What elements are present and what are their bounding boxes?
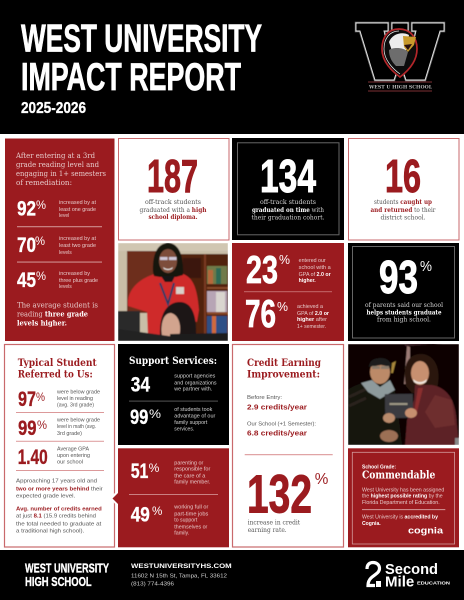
description: district school. [380,214,426,222]
text: credits: Avg. number of credits earned [16,506,102,512]
text: credits: at just 8.1 (15.9 credits behind [16,514,96,520]
number 187: 187 [147,150,198,202]
closing text: levels higher. [17,319,67,328]
panel: credit earning improvement [232,344,344,547]
stat: 34: and organizations [174,380,217,386]
heading: Typical Student [18,357,97,369]
description [140,199,207,221]
text: age and grade: Approaching 17 years old and [16,479,97,485]
stat: 49%: 49 [131,504,150,527]
logo: Second Mile Education [367,561,450,591]
stat: 92%: % [36,198,46,212]
stat: 97%: level in reading [57,396,93,402]
text: rating [362,487,445,506]
before entry: Before Entry: [247,395,282,401]
text: rating: West University has been assigned [362,487,445,493]
stat: 1.40: upon entering [57,453,90,459]
stat: 34: support agencies [174,374,216,380]
stat: 49%: to support [174,518,198,524]
description: from high school. [377,316,431,324]
stat: 23%: higher. [299,278,316,284]
intro text: grade reading level and [16,160,99,169]
stat: 51%: family member. [174,480,210,486]
stat: 34 [131,374,217,397]
stat: 51%: 51 [131,460,149,483]
stat: 97% [18,388,100,411]
panel: remediation [5,138,114,341]
stat: 97%: % [36,390,45,404]
description: school diploma. [148,214,198,221]
before entry [247,395,307,411]
stat: 49%: themselves or [174,524,208,530]
intro text [15,151,106,187]
heading: Commendable [362,469,435,482]
description [365,302,443,324]
stat: 49%: part-time jobs [174,511,209,517]
stat: 97%: (avg. 3rd grade) [57,403,94,409]
stat: 70%: % [35,234,45,248]
contact details [131,563,232,588]
year subtitle: 2025-2026 [21,100,86,117]
stat: 99%: family support [174,420,208,426]
school name [25,562,109,589]
stat: 76%: 76 [245,293,276,336]
number 132%: 132 [247,465,312,525]
title [21,18,262,99]
photo: teacher and student [118,243,228,341]
description: off-track students [145,199,201,206]
stat: 51%: % [149,461,160,475]
stat: 34: 34 [131,374,150,397]
logo: Second Mile Education: Second [385,561,438,578]
number 132%: % [315,471,328,488]
text: credits: the total needed to graduate at [16,521,102,527]
panel: student responsibilities [112,448,229,547]
heading [247,357,322,381]
description: students caught up [374,199,432,206]
stat: 99%: 99 [18,417,36,440]
closing text [17,301,98,328]
footer band [0,550,464,600]
stat: 76%: 1+ semester. [297,324,326,330]
heading: Improvement: [247,369,320,381]
contact details: (813) 774-4396 [131,582,174,588]
school name: WEST UNIVERSITY [25,562,109,576]
description [248,519,301,534]
number 16: 16 [385,150,421,202]
stat: 23%: % [279,252,290,267]
stat: 97%: were below grade [57,390,100,396]
stat: 99%: advantage of our [174,414,216,420]
stat: 51% [131,460,211,486]
panel: school grade commendable [348,448,459,547]
description: helps students graduate [366,310,442,316]
description: of parents said our school [365,302,443,309]
stat: 51%: the care of a [174,473,206,479]
stat: 23% [246,249,331,292]
before entry: 2.9 credits/year [247,402,307,411]
our school: 6.8 credits/year [247,429,307,438]
logo: Second Mile Education: Mile [385,574,414,591]
description: graduated with a high [140,207,207,214]
text: credits: a traditional high school). [16,529,85,535]
text: accreditation [362,514,438,527]
stat: 99%: level in math (avg. [57,424,96,430]
stat: 45%: % [36,269,46,283]
description: their graduation cohort. [252,214,325,222]
stat: 99%: of students took [174,407,213,413]
stat: 1.40: our school [57,460,83,466]
closing text: reading three grade [17,310,88,319]
stat: 45%: levels [59,284,72,290]
panel: 16 returned [348,138,459,240]
our school [247,421,316,438]
text: rating: Florida Department of Education. [362,500,440,506]
stat: 99%: % [37,418,47,432]
description: graduated on time with [252,207,324,214]
stat: 99% [18,417,100,440]
title: WEST UNIVERSITY [21,18,262,60]
stat: 70%: levels [59,250,72,256]
photo: graduation handshake [348,342,459,445]
stat: 76%: % [277,299,288,314]
stat: 76%: achieved a [297,304,323,310]
stat: 49%: family. [174,531,189,537]
stat: 99%: 3rd grade) [57,431,82,437]
stat: 45%: 45 [17,269,36,292]
stat: 76%: GPA of 2.0 or [297,311,329,317]
intro text: After entering at a 3rd [15,151,95,160]
title: IMPACT REPORT [21,56,241,99]
stat: 92%: level [59,213,69,219]
stat: 76% [245,293,329,336]
number 93%: % [420,258,432,275]
text: rating: the highest possible rating by the [362,494,443,500]
text: accreditation: Cognia. [362,521,381,527]
stat: 99%: 99 [130,406,148,429]
stat: 70%: least two grade [59,243,96,249]
stat: 92%: least one grade [59,207,96,213]
stat: 70%: increased by at [59,236,97,242]
description [252,199,325,222]
intro text: engaging in 1+ semesters [16,169,106,178]
logo: West U eagle: WEST U HIGH SCHOOL [368,84,433,90]
closing text: The average student is [17,301,98,310]
stat: 70%: 70 [17,234,36,257]
description: increase in credit [248,519,301,526]
text: age and grade: expected grade level. [16,494,76,500]
heading: Support Services: [129,355,217,367]
stat: 49%: working full or [174,504,209,510]
logo: Second Mile Education: EDUCATION [417,581,450,586]
logo: Cognia: cognia [408,526,444,536]
stat: 51%: parenting or [174,460,204,466]
label: School Grade: [362,464,396,470]
stat: 1.40: Average GPA [57,446,90,452]
stat: 92%: increased by at [59,200,97,206]
stat: 23%: 23 [246,249,278,292]
school name: HIGH SCHOOL [25,575,92,589]
text: accreditation: West University is accredited by [362,514,438,520]
stat: 23%: entered our [299,258,326,264]
intro text: of remediation: [16,178,72,187]
panel: 134 graduates [232,138,344,240]
stat: 92%: 92 [17,198,36,221]
stat: 1.40: 1.40 [18,446,48,469]
panel: 93% parents [348,243,459,341]
stat: 99%: % [149,407,161,421]
panel: GPA improvement [232,243,344,341]
contact details: 11602 N 15th St, Tampa, FL 33612 [131,573,227,579]
header band [0,0,464,134]
stat: 45% [17,269,98,292]
heading [18,357,97,381]
heading: Referred to Us: [18,369,93,381]
our school: Our School (+1 Semester): [247,421,316,427]
stat: 76%: higher after [297,317,327,323]
number 134: 134 [260,150,316,202]
panel: 187 graduates [118,138,229,240]
stat: 99%: services. [174,427,194,433]
description: and returned to their [370,207,436,214]
heading: Credit Earning [247,357,322,369]
contact details: WESTUNIVERSITYHS.COM [131,563,232,570]
panel: support services [118,344,229,445]
stat: 1.40 [18,446,90,469]
description: off-track students [260,199,316,206]
stat: 49% [131,504,209,537]
stat: 45%: three plus grade [59,278,98,284]
text: age and grade: two or more years behind their [16,486,103,492]
stat: 23%: GPA of 2.0 or [299,272,331,278]
description [370,199,436,222]
description: earning rate. [248,527,287,534]
text: credits [16,506,102,535]
text: age and grade [16,479,103,500]
panel: typical student [4,344,114,547]
stat: 99% [130,406,216,433]
stat: 92% [17,198,97,221]
stat: 23%: school with a [299,265,331,271]
stat: 99%: were below grade [57,418,100,424]
stat: 70% [17,234,97,257]
stat: 49%: % [152,504,163,518]
logo: West U eagle [356,23,444,91]
stat: 34: we partner with. [174,387,212,393]
number 93%: 93 [379,251,418,303]
stat: 97%: 97 [18,388,36,411]
stat: 51%: responsible for [174,467,211,473]
stat: 45%: increased by [59,271,91,277]
